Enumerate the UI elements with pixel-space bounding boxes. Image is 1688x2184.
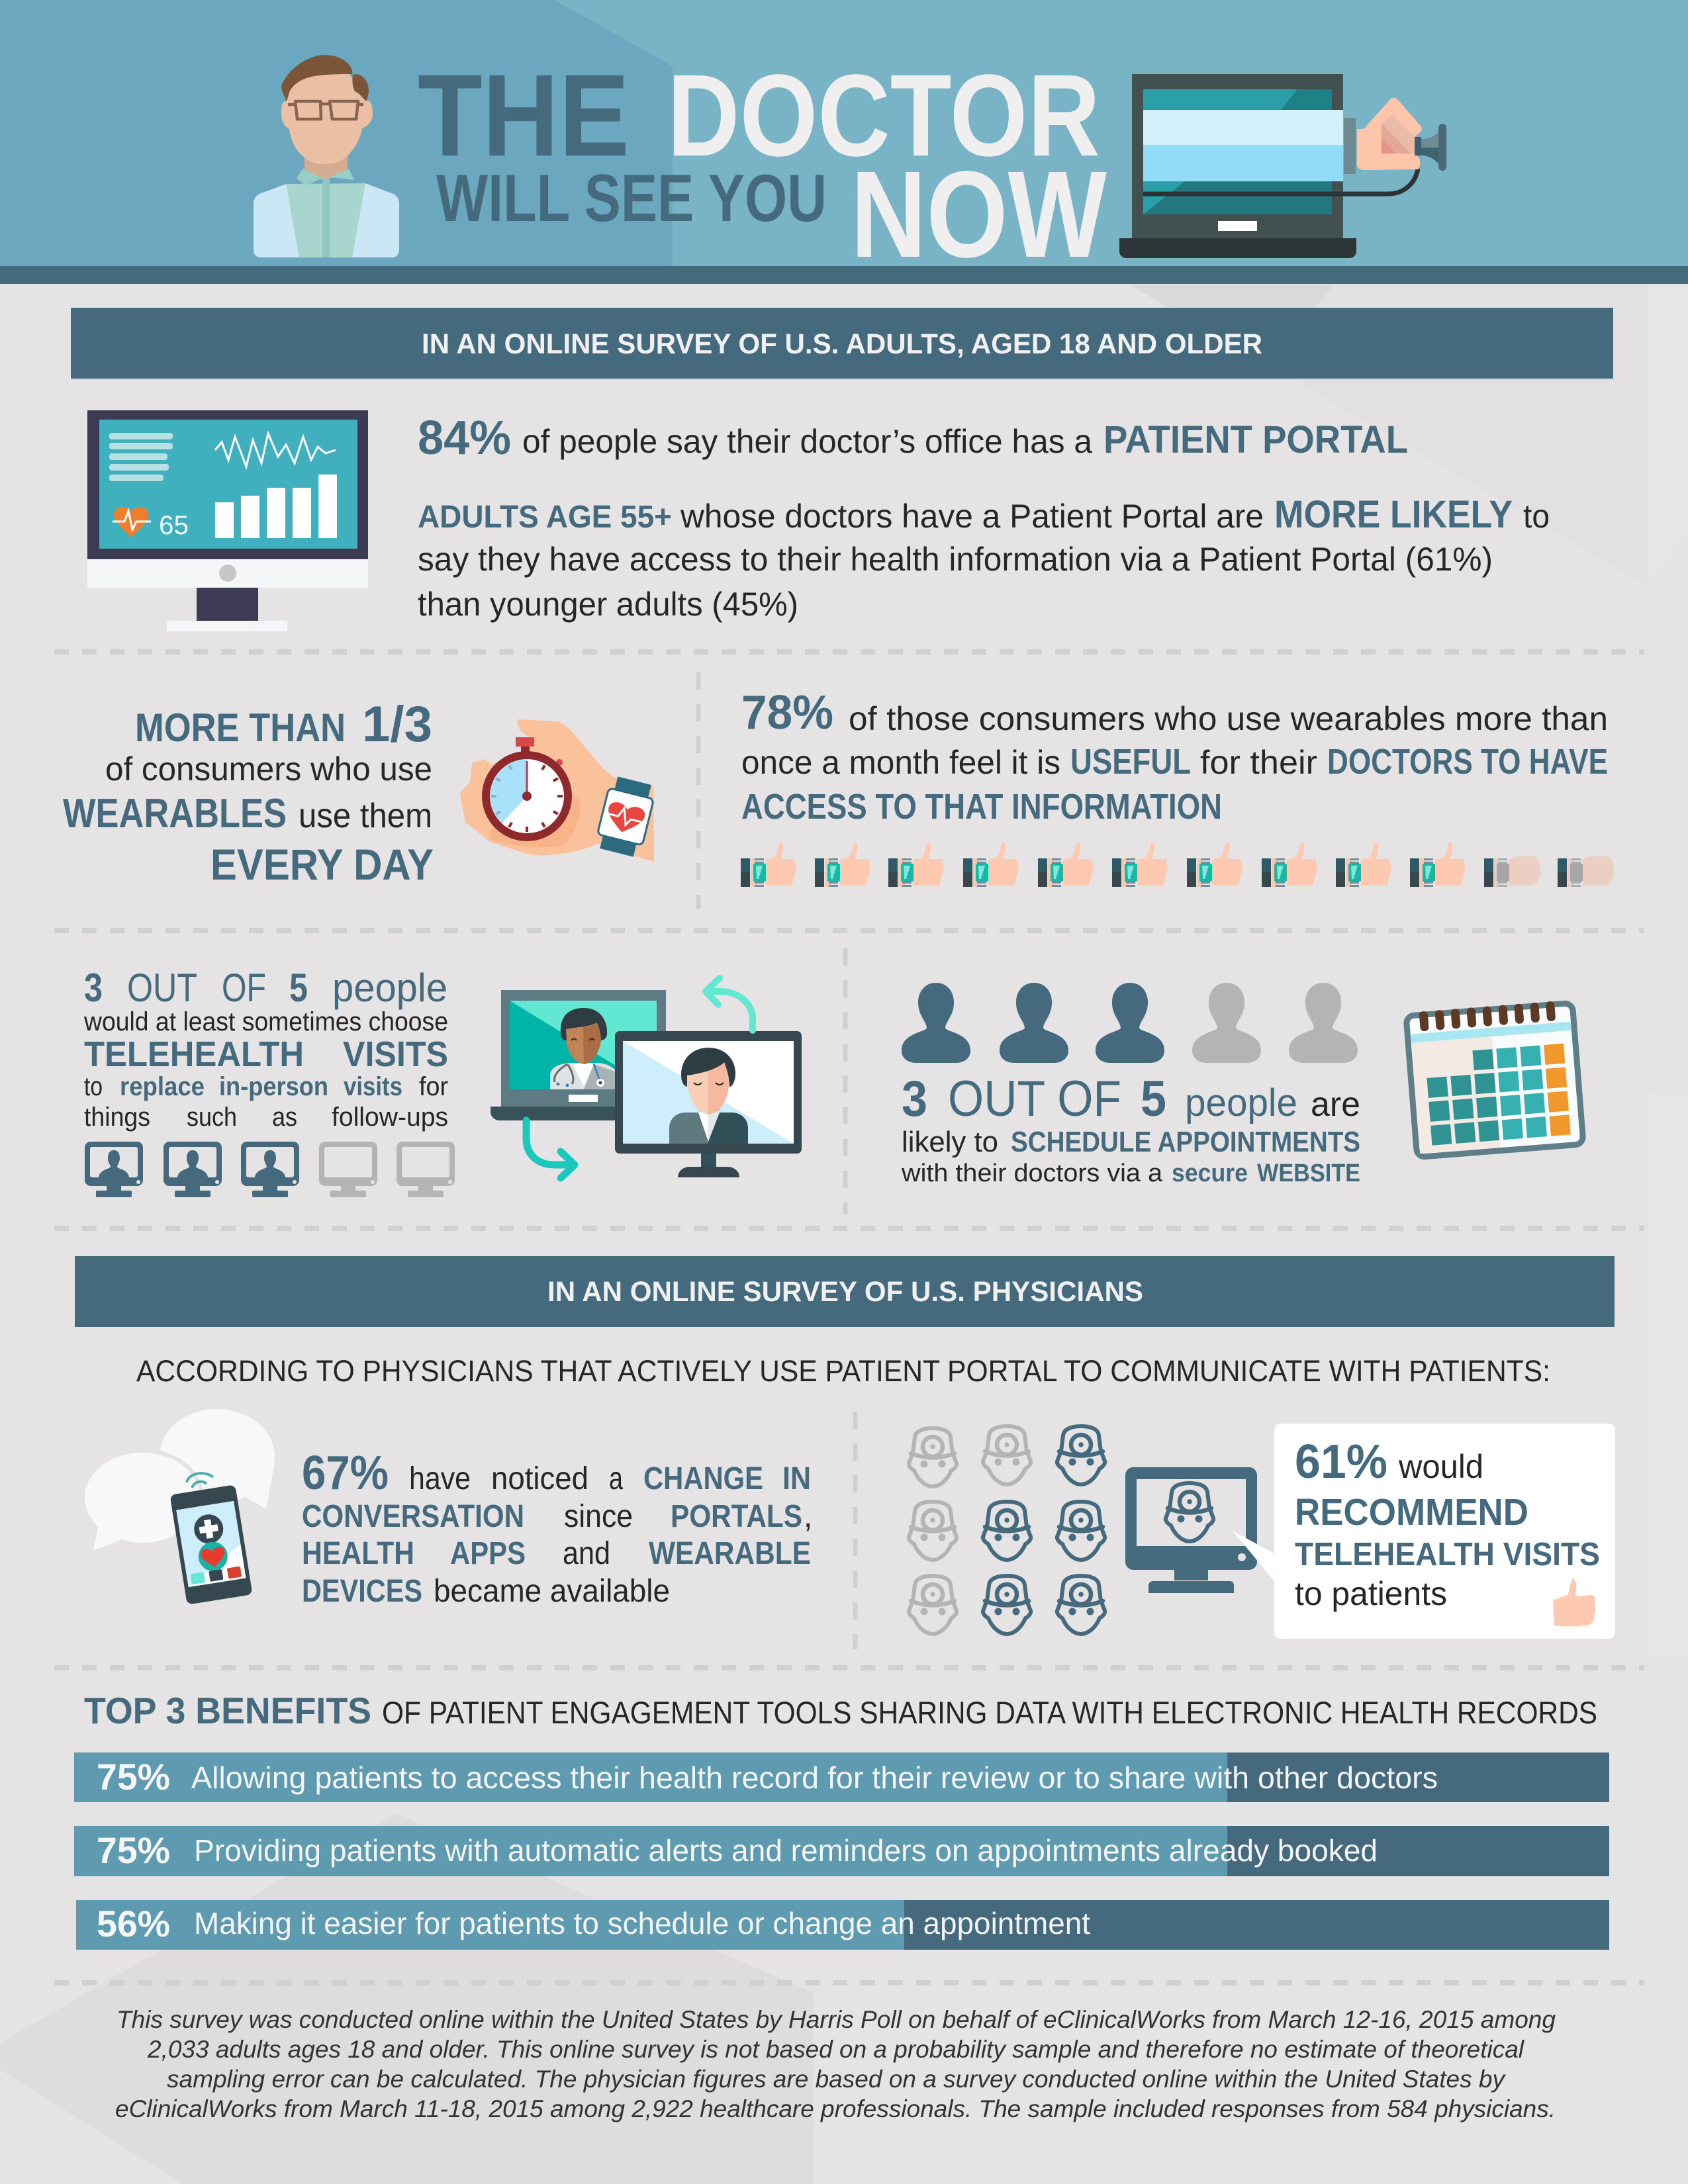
- text: 67% change in conversation: CHANGE: [643, 1461, 763, 1496]
- text: 67% change in conversation: have: [409, 1461, 471, 1496]
- header banner: [0, 0, 1688, 284]
- text: more than 1/3 use wearables: use them: [299, 797, 432, 835]
- section banner: physicians: [75, 1256, 1615, 1327]
- text: adults age 55+ paragraph: MORE LIKELY: [1274, 493, 1513, 536]
- text: 67% change in conversation: CONVERSATION: [302, 1499, 524, 1534]
- icon: phone with speech bubbles: [85, 1409, 275, 1605]
- text: 3 out of 5 telehealth visits: VISITS: [343, 1034, 448, 1074]
- text: 3 out of 5 schedule appointments: OUT OF: [948, 1071, 1121, 1127]
- footnote: survey methodology: [115, 2006, 1556, 2122]
- text: adults age 55+ paragraph: say they have access to their health information via a Patient Portal (61%): [418, 541, 1493, 578]
- section banner: adults: [71, 308, 1613, 380]
- text: patient portal statistic: [418, 412, 1408, 465]
- text: 3 out of 5 schedule appointments: are: [1311, 1085, 1360, 1124]
- pictogram: 3 of 5 monitors: [85, 1142, 455, 1197]
- footnote: survey methodology: sampling error can be calculated. The physician figures are based on a survey conducted online within the United States by: [167, 2066, 1506, 2093]
- bar: 56% easier scheduling: [76, 1900, 1609, 1950]
- text: patient portal statistic: PATIENT PORTAL: [1103, 418, 1408, 461]
- text: 3 out of 5 telehealth visits: for: [419, 1072, 448, 1101]
- text: 67% change in conversation: HEALTH: [302, 1536, 414, 1571]
- text: 78% wearables useful: 78%: [741, 686, 833, 739]
- bar: 75% automatic alerts: [74, 1826, 1609, 1876]
- text: more than 1/3 use wearables: EVERY DAY: [211, 840, 434, 889]
- callout: 61% recommend telehealth: 61%: [1295, 1435, 1387, 1488]
- bar: 56% easier scheduling: 56%: [97, 1903, 170, 1944]
- title: WILL SEE YOU: [436, 161, 827, 236]
- text: 3 out of 5 schedule appointments: 3: [902, 1071, 927, 1127]
- text: 3 out of 5 schedule appointments: SCHEDULE APPOINTMENTS: [1011, 1126, 1360, 1158]
- text: 3 out of 5 telehealth visits: [83, 966, 448, 1132]
- text: 3 out of 5 telehealth visits: OF: [222, 966, 266, 1010]
- text: 78% wearables useful: [741, 686, 1608, 827]
- callout: 61% recommend telehealth: [1233, 1424, 1615, 1639]
- text: 3 out of 5 telehealth visits: 5: [289, 966, 308, 1010]
- text: 3 out of 5 telehealth visits: replace: [120, 1072, 205, 1101]
- text: adults age 55+ paragraph: to: [1523, 498, 1550, 535]
- text: 3 out of 5 telehealth visits: TELEHEALTH: [84, 1034, 304, 1074]
- text: 67% change in conversation: ,: [804, 1499, 812, 1534]
- text: more than 1/3 use wearables: MORE THAN: [135, 705, 346, 750]
- section banner: physicians: IN AN ONLINE SURVEY OF U.S. PHYSICIANS: [547, 1276, 1143, 1308]
- title: DOCTOR: [667, 51, 1100, 181]
- text: 78% wearables useful: once a month feel it is: [741, 744, 1060, 781]
- heading: top 3 benefits: [84, 1690, 1597, 1731]
- text: 67% change in conversation: IN: [782, 1461, 811, 1496]
- heading: top 3 benefits: TOP 3 BENEFITS: [84, 1690, 371, 1731]
- pictogram: 10 of 12 thumbs up with watches: [741, 842, 1614, 887]
- text: 78% wearables useful: for their: [1200, 744, 1317, 781]
- text: 3 out of 5 schedule appointments: WEBSITE: [1257, 1160, 1360, 1187]
- text: 67% change in conversation: WEARABLE: [649, 1536, 811, 1571]
- text: 3 out of 5 telehealth visits: 3: [84, 966, 103, 1010]
- text: adults age 55+ paragraph: [418, 493, 1550, 623]
- callout: 61% recommend telehealth: RECOMMEND: [1295, 1491, 1528, 1533]
- callout: 61% recommend telehealth: would: [1398, 1448, 1483, 1485]
- text: 78% wearables useful: ACCESS TO THAT INFORMATION: [741, 787, 1222, 827]
- text: more than 1/3 use wearables: WEARABLES: [63, 791, 287, 837]
- bar: 75% access health record: Allowing patients to access their health record for their review or to share with other doctors: [191, 1760, 1438, 1795]
- illustration: telehealth laptop and monitor: [491, 990, 802, 1177]
- text: 3 out of 5 schedule appointments: 5: [1141, 1071, 1166, 1127]
- pictogram: 3 of 5 people: [902, 983, 1358, 1063]
- subheading: according to physicians: ACCORDING TO PHYSICIANS THAT ACTIVELY USE PATIENT PORTAL TO COMMUNICATE WITH PATIENTS:: [136, 1354, 1550, 1388]
- text: 3 out of 5 telehealth visits: as: [272, 1103, 297, 1132]
- illustration: laptop with stethoscope hand: [1119, 74, 1446, 258]
- text: 78% wearables useful: of those consumers who use wearables more than: [849, 700, 1608, 737]
- title: THE: [418, 51, 630, 181]
- icon: desktop monitor with health data: 65: [159, 511, 189, 540]
- arrow: laptop to monitor: [526, 1120, 575, 1178]
- text: adults age 55+ paragraph: ADULTS AGE 55+: [418, 500, 672, 535]
- text: 3 out of 5 telehealth visits: follow-ups: [332, 1103, 448, 1132]
- pictogram: 6 of 9 doctor heads: [909, 1426, 1105, 1634]
- text: patient portal statistic: of people say their doctor’s office has a: [522, 423, 1092, 460]
- bar: 56% easier scheduling: Making it easier for patients to schedule or change an appointment: [194, 1906, 1090, 1940]
- text: 3 out of 5 telehealth visits: such: [187, 1103, 237, 1132]
- text: 67% change in conversation: a: [609, 1461, 623, 1496]
- text: 3 out of 5 telehealth visits: in-person: [219, 1072, 328, 1101]
- text: 78% wearables useful: USEFUL: [1070, 742, 1191, 782]
- text: 67% change in conversation: since: [564, 1499, 633, 1534]
- text: 67% change in conversation: 67%: [302, 1447, 389, 1500]
- text: 67% change in conversation: PORTALS: [671, 1499, 802, 1534]
- text: 3 out of 5 schedule appointments: [901, 1071, 1360, 1187]
- text: 67% change in conversation: [302, 1447, 812, 1609]
- text: 3 out of 5 schedule appointments: with their doctors via a: [901, 1160, 1163, 1187]
- bar: 75% automatic alerts: Providing patients with automatic alerts and reminders on appointments already booked: [194, 1833, 1378, 1868]
- text: 67% change in conversation: became available: [434, 1574, 670, 1609]
- text: 67% change in conversation: APPS: [450, 1536, 526, 1571]
- callout: 61% recommend telehealth: TELEHEALTH VISITS: [1295, 1537, 1600, 1572]
- text: adults age 55+ paragraph: than younger adults (45%): [418, 586, 798, 623]
- icon: calendar: [1406, 999, 1583, 1158]
- text: 3 out of 5 telehealth visits: OUT: [127, 966, 197, 1010]
- callout: 61% recommend telehealth: to patients: [1295, 1575, 1447, 1612]
- text: 67% change in conversation: noticed: [491, 1461, 588, 1496]
- text: 78% wearables useful: DOCTORS TO HAVE: [1327, 742, 1608, 782]
- bar: 75% automatic alerts: 75%: [97, 1829, 170, 1871]
- text: 3 out of 5 schedule appointments: likely to: [902, 1126, 998, 1158]
- text: more than 1/3 use wearables: [63, 696, 434, 889]
- bar: 75% access health record: 75%: [97, 1756, 170, 1797]
- text: 3 out of 5 telehealth visits: people: [332, 966, 447, 1010]
- dashed dividers: [54, 652, 1644, 1983]
- text: 67% change in conversation: DEVICES: [302, 1574, 422, 1609]
- text: 3 out of 5 schedule appointments: secure: [1172, 1160, 1248, 1187]
- arrow: monitor to laptop: [706, 978, 753, 1030]
- icon: hand with stopwatch and smartwatch: [460, 719, 657, 862]
- title: [418, 51, 1107, 283]
- text: patient portal statistic: 84%: [418, 412, 511, 465]
- footnote: survey methodology: 2,033 adults ages 18 and older. This online survey is not based on a probability sample and therefore no estimate of theoretical: [147, 2036, 1525, 2063]
- icon: monitor with doctor: [1125, 1467, 1257, 1593]
- footnote: survey methodology: eClinicalWorks from March 11-18, 2015 among 2,922 healthcare professionals. The sample included responses from 584 physicians.: [115, 2095, 1556, 2122]
- text: 67% change in conversation: and: [563, 1536, 610, 1571]
- text: 3 out of 5 telehealth visits: to: [84, 1072, 103, 1101]
- footnote: survey methodology: This survey was conducted online within the United States by Harris Poll on behalf of eClinicalWorks from March 12-16, 2015 among: [117, 2006, 1556, 2033]
- icon: desktop monitor with health data: [87, 410, 368, 631]
- illustration: doctor: [254, 55, 399, 257]
- section banner: adults: IN AN ONLINE SURVEY OF U.S. ADULTS, AGED 18 AND OLDER: [422, 328, 1262, 360]
- text: 3 out of 5 schedule appointments: people: [1185, 1081, 1297, 1124]
- title: NOW: [851, 146, 1107, 283]
- bar: 75% access health record: [74, 1752, 1609, 1802]
- text: more than 1/3 use wearables: of consumers who use: [105, 751, 432, 788]
- text: 3 out of 5 telehealth visits: things: [84, 1103, 150, 1132]
- text: 3 out of 5 telehealth visits: visits: [344, 1072, 402, 1101]
- text: more than 1/3 use wearables: 1/3: [362, 696, 432, 752]
- text: adults age 55+ paragraph: whose doctors have a Patient Portal are: [680, 498, 1264, 535]
- text: 3 out of 5 telehealth visits: would at least sometimes choose: [83, 1007, 448, 1036]
